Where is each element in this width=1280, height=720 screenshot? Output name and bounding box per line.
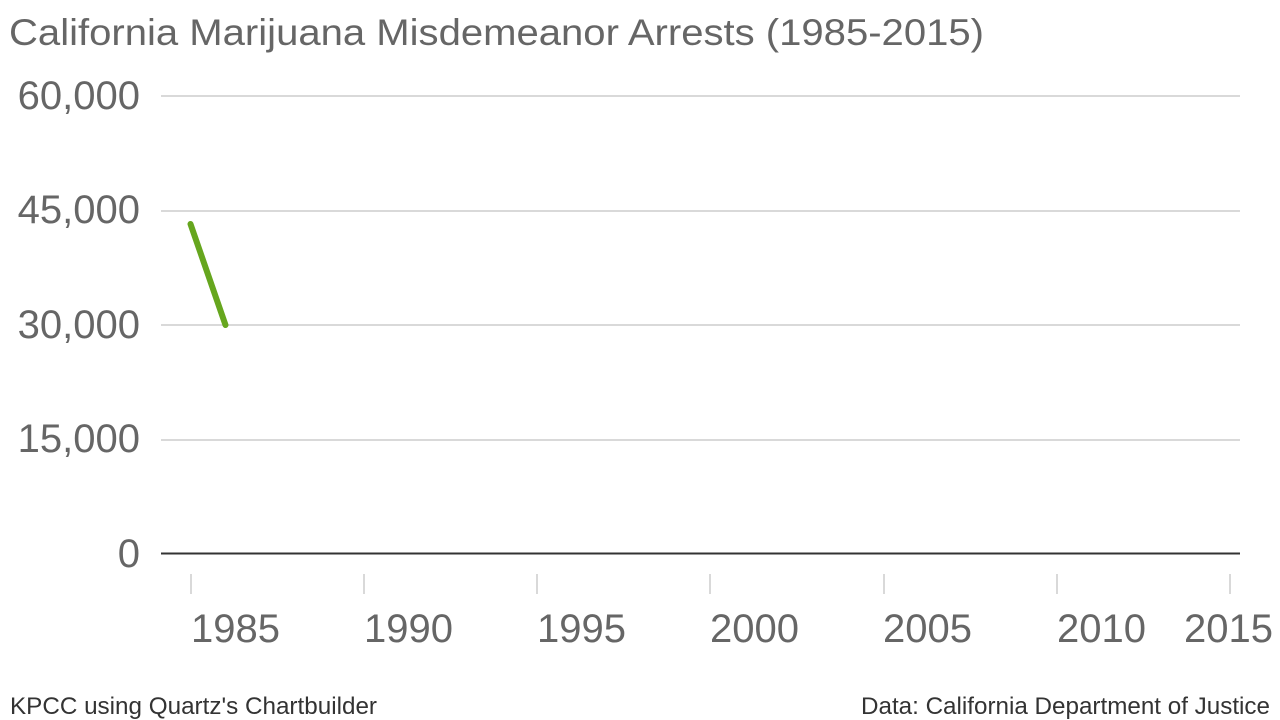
- y axis: 45,000: [18, 188, 140, 232]
- x axis: [191, 574, 1273, 651]
- x axis: 2005: [883, 607, 972, 651]
- x axis: 1990: [364, 607, 453, 651]
- y axis: 30,000: [18, 303, 140, 347]
- y axis: 0: [118, 532, 140, 576]
- x axis: 1985: [191, 607, 280, 651]
- data line: arrests: [190, 224, 226, 325]
- y axis: 60,000: [18, 74, 140, 118]
- data source: Data: California Department of Justice: [861, 693, 1270, 720]
- x axis: 1995: [537, 607, 626, 651]
- y axis: 15,000: [18, 417, 140, 461]
- source credit: KPCC using Quartz's Chartbuilder: [10, 693, 377, 720]
- x axis: 2000: [710, 607, 799, 651]
- x axis: 2015: [1184, 607, 1273, 651]
- x axis: 2010: [1057, 607, 1146, 651]
- title: California Marijuana Misdemeanor Arrests (1985-2015): [9, 12, 984, 53]
- y axis: [18, 74, 1240, 576]
